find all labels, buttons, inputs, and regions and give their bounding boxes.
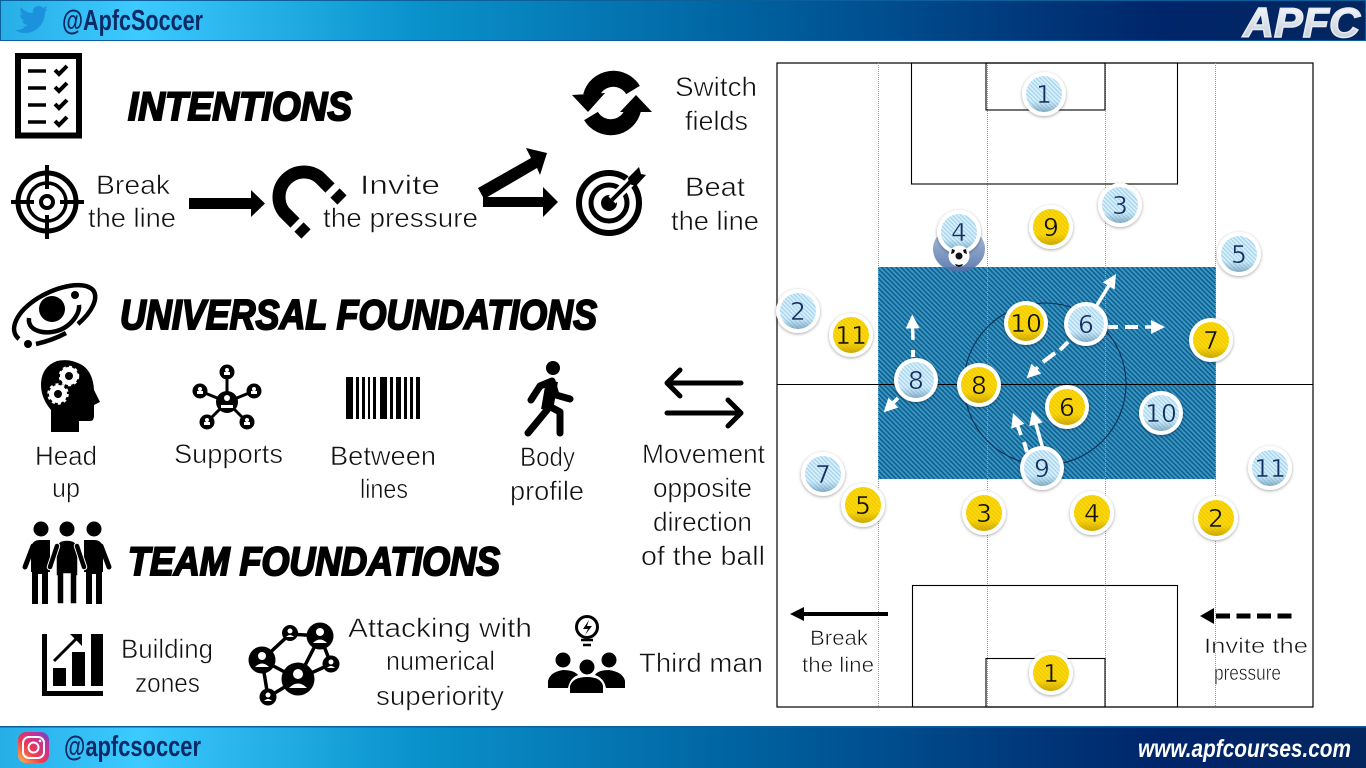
item: third man: Third man xyxy=(639,648,763,678)
item: attacking with numerical superiority: Attacking with xyxy=(348,613,532,643)
icon: head with gears xyxy=(41,360,100,432)
item: movement opposite direction of the ball: opposite xyxy=(653,473,752,503)
icon: bar chart with arrow xyxy=(42,634,103,696)
legend: invite the pressure: pressure xyxy=(1214,662,1281,685)
highlighted zone xyxy=(878,267,1216,479)
player yellow 3: 3 xyxy=(976,499,992,528)
player blue 3 xyxy=(1098,183,1142,227)
player yellow 1 xyxy=(1029,651,1073,695)
player yellow 3 xyxy=(962,491,1006,535)
text: switch fields xyxy=(675,72,757,136)
player blue 8: 8 xyxy=(908,366,924,395)
item: between lines: lines xyxy=(360,474,408,504)
section: team foundations xyxy=(25,522,763,711)
player yellow 8: 8 xyxy=(971,371,987,400)
heading: team foundations: TEAM FOUNDATIONS xyxy=(128,540,500,584)
player yellow 7 xyxy=(1189,318,1233,362)
item: between lines xyxy=(330,377,436,504)
item: body profile: Body xyxy=(520,442,575,472)
item: attacking with numerical superiority: superiority xyxy=(376,681,505,711)
text: invite the pressure: the pressure xyxy=(323,203,478,233)
player blue 1 xyxy=(1022,72,1066,116)
icon: support network xyxy=(192,364,262,430)
player blue 7: 7 xyxy=(815,460,831,489)
middle person xyxy=(50,540,84,604)
player blue 2: 2 xyxy=(790,297,806,326)
player blue 6: 6 xyxy=(1078,310,1094,339)
right person xyxy=(84,540,109,604)
legend: break the line: the line xyxy=(802,654,874,677)
text: break the line xyxy=(88,170,176,233)
icon: instagram xyxy=(18,732,49,763)
player blue 10 xyxy=(1139,391,1183,435)
player blue 10: 10 xyxy=(1145,399,1177,428)
APFC logo: APFC xyxy=(1242,0,1361,46)
team: blue players xyxy=(776,72,1292,496)
text: switch fields: Switch xyxy=(675,72,757,102)
player blue 9: 9 xyxy=(1034,454,1050,483)
player yellow 9 xyxy=(1029,205,1073,249)
item: between lines: Between xyxy=(330,441,436,471)
item: head up xyxy=(35,360,100,503)
player yellow 10: 10 xyxy=(1010,309,1042,338)
icon: checklist xyxy=(18,56,79,136)
player blue 8 xyxy=(894,358,938,402)
section: intentions xyxy=(11,56,759,239)
item: building zones: Building xyxy=(121,634,213,664)
text: break the line: Break xyxy=(96,170,171,200)
player yellow 8 xyxy=(957,363,1001,407)
twitter handle: @ApfcSoccer xyxy=(62,5,203,37)
item: movement opposite direction of the ball: Movement xyxy=(642,439,765,469)
text: break the line: the line xyxy=(88,203,176,233)
heading: universal foundations: UNIVERSAL FOUNDATIONS xyxy=(120,291,597,338)
player blue 5 xyxy=(1217,232,1261,276)
movement arrows xyxy=(891,283,1154,452)
item: building zones xyxy=(42,634,213,698)
panel: tactical pitch xyxy=(776,63,1313,707)
instagram handle: @apfcsoccer xyxy=(64,731,201,763)
player blue 9 xyxy=(1020,446,1064,490)
ball carrier halo xyxy=(933,226,985,272)
legend: break the line xyxy=(790,607,888,677)
player yellow 9: 9 xyxy=(1043,213,1059,242)
legend: invite the pressure xyxy=(1200,608,1308,685)
item: third man xyxy=(548,616,763,693)
icon: crosshair xyxy=(11,165,84,239)
player blue 2 xyxy=(776,289,820,333)
player yellow 4 xyxy=(1070,491,1114,535)
item: supports: Supports xyxy=(174,439,283,469)
player yellow 4: 4 xyxy=(1084,499,1100,528)
player blue 6 xyxy=(1064,302,1108,346)
player blue 11 xyxy=(1248,446,1292,490)
text: beat the line: Beat xyxy=(685,172,746,202)
text: invite the pressure xyxy=(323,170,478,233)
section: universal foundations xyxy=(14,285,765,571)
icon: barcode xyxy=(346,377,420,419)
top banner xyxy=(0,0,1366,46)
player blue 7 xyxy=(801,452,845,496)
icon: twitter bird xyxy=(15,6,48,33)
pitch markings xyxy=(777,63,1313,707)
legend: break the line: Break xyxy=(810,627,869,650)
player yellow 5 xyxy=(841,483,885,527)
left person xyxy=(25,540,50,604)
icon: opposite arrows xyxy=(667,370,741,426)
player yellow 7: 7 xyxy=(1203,326,1219,355)
player blue 4 xyxy=(937,210,981,254)
icon: switch arrows xyxy=(572,79,652,127)
player yellow 5: 5 xyxy=(855,491,871,520)
player yellow 11: 11 xyxy=(835,321,867,350)
player blue 3: 3 xyxy=(1112,191,1128,220)
bottom banner xyxy=(0,726,1366,768)
player blue 5: 5 xyxy=(1231,240,1247,269)
item: building zones: zones xyxy=(135,668,200,698)
item: supports xyxy=(174,364,283,469)
icon: three team members xyxy=(25,522,109,604)
item: movement opposite direction of the ball: direction xyxy=(653,507,752,537)
player blue 1: 1 xyxy=(1036,80,1052,109)
icon: people network xyxy=(248,622,340,706)
player yellow 6 xyxy=(1045,385,1089,429)
text: beat the line: the line xyxy=(671,206,759,236)
text: beat the line xyxy=(671,172,759,236)
item: movement opposite direction of the ball xyxy=(641,370,765,571)
item: body profile: profile xyxy=(510,476,584,506)
player yellow 6: 6 xyxy=(1059,393,1075,422)
text: invite the pressure: Invite xyxy=(360,170,440,200)
team: yellow players xyxy=(829,205,1238,695)
player yellow 11 xyxy=(829,313,873,357)
item: body profile xyxy=(510,361,584,506)
pitch outline xyxy=(777,63,1313,707)
player yellow 1: 1 xyxy=(1043,659,1059,688)
player blue 11: 11 xyxy=(1254,454,1286,483)
icon: planet orbit xyxy=(14,285,95,348)
item: head up: up xyxy=(52,473,80,503)
item: attacking with numerical superiority: numerical xyxy=(386,646,495,676)
item: attacking with numerical superiority xyxy=(248,613,532,711)
icon: target xyxy=(579,167,646,233)
player blue 4: 4 xyxy=(951,218,967,247)
player yellow 2 xyxy=(1194,496,1238,540)
player yellow 10 xyxy=(1004,301,1048,345)
text: switch fields: fields xyxy=(685,106,748,136)
legend: invite the pressure: Invite the xyxy=(1204,635,1308,658)
arrow: break to invite xyxy=(189,190,265,217)
heading: intentions: INTENTIONS xyxy=(128,85,352,129)
icon: football xyxy=(948,246,970,267)
player yellow 2: 2 xyxy=(1208,504,1224,533)
icon: team with lightbulb xyxy=(548,616,625,693)
icon: walking person xyxy=(528,361,570,433)
item: movement opposite direction of the ball: of the ball xyxy=(641,541,765,571)
icon: magnet xyxy=(279,172,342,234)
item: head up: Head xyxy=(35,441,97,471)
arrow: forked arrows xyxy=(478,148,558,217)
